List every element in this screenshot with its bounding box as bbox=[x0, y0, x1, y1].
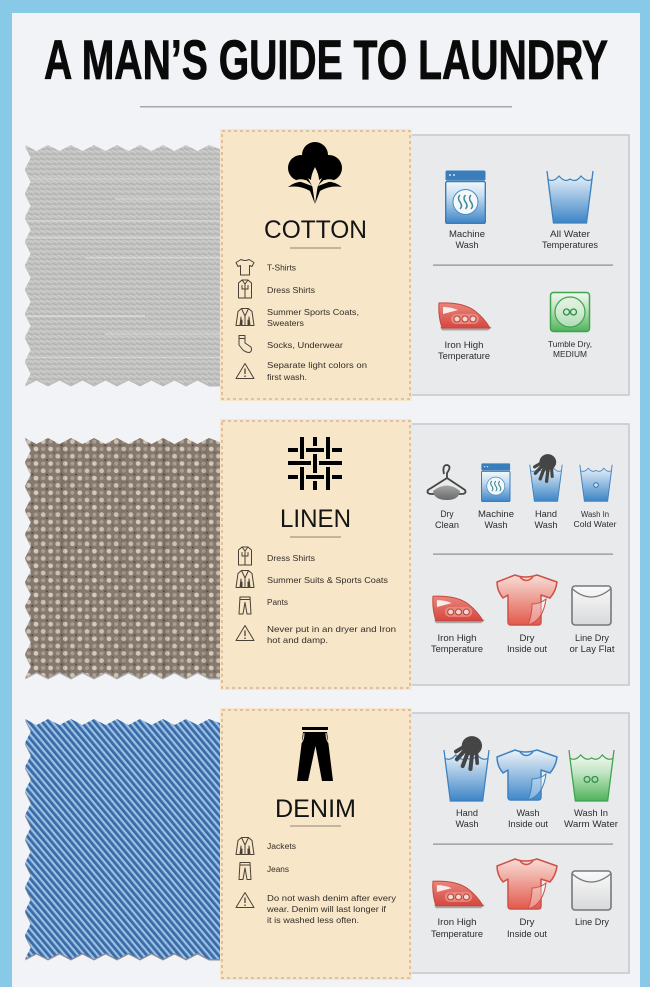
label: iron high temperature: Temperature bbox=[431, 644, 483, 654]
label: iron high temperature: Iron High bbox=[438, 633, 477, 643]
icon: dress shirt bbox=[238, 547, 252, 565]
label: tumble dry medium: Tumble Dry, bbox=[548, 340, 592, 349]
icon: tumble dry bbox=[550, 292, 590, 332]
icon: dress shirt bbox=[238, 280, 252, 298]
icon: iron bbox=[433, 596, 485, 623]
icon: pants bbox=[239, 862, 251, 880]
icon: jacket bbox=[236, 570, 254, 588]
title underline bbox=[140, 106, 512, 108]
gray care panel: linen bbox=[410, 424, 629, 685]
gray care panel: cotton bbox=[410, 135, 629, 395]
text: cotton warning: Separate light colors on bbox=[267, 360, 367, 370]
icon: machine wash bbox=[446, 170, 486, 224]
label: machine wash: Wash bbox=[484, 520, 508, 530]
label card: cotton bbox=[220, 129, 412, 401]
icon: line dry bbox=[572, 586, 611, 625]
label card: linen bbox=[220, 419, 412, 690]
icon: jacket bbox=[236, 308, 254, 326]
label: machine wash: Machine bbox=[478, 509, 514, 519]
section: linen bbox=[25, 419, 629, 690]
label: dry inside out bbox=[507, 633, 548, 654]
label: line dry or lay flat bbox=[570, 633, 615, 654]
label: iron high temperature: Iron High bbox=[444, 340, 484, 350]
text: coats: Summer Sports Coats, bbox=[267, 307, 359, 317]
label: hand wash bbox=[534, 509, 558, 530]
label: machine wash bbox=[478, 509, 514, 530]
icon: t-shirt bbox=[236, 260, 254, 275]
label: machine wash: Machine bbox=[449, 229, 485, 239]
label: line dry: Line Dry bbox=[575, 917, 610, 927]
icon: iron bbox=[433, 881, 485, 908]
heading: cotton: COTTON bbox=[264, 216, 367, 244]
label: wash in warm water bbox=[564, 808, 618, 829]
label: iron high temperature: Temperature bbox=[431, 929, 483, 939]
label: wash inside out bbox=[508, 808, 549, 829]
icon: iron bbox=[439, 303, 492, 330]
label: iron high temperature bbox=[431, 633, 483, 654]
icon: pants bbox=[239, 597, 251, 614]
panel divider bbox=[433, 264, 613, 266]
icon: machine wash bbox=[481, 463, 510, 502]
label: dry inside out: Inside out bbox=[507, 644, 548, 654]
text: t-shirts: T-Shirts bbox=[267, 262, 296, 272]
text: socks: Socks, Underwear bbox=[267, 340, 343, 350]
icon: warm water bbox=[569, 750, 614, 801]
text: coats bbox=[267, 307, 359, 328]
heading rule bbox=[290, 826, 341, 827]
label: wash in cold water: Cold Water bbox=[574, 520, 617, 529]
heading rule bbox=[290, 248, 341, 249]
text: dress shirts: Dress Shirts bbox=[267, 553, 315, 563]
label: hand wash: Wash bbox=[456, 819, 479, 829]
label: all water temperatures: All Water bbox=[550, 229, 590, 239]
heading: denim: DENIM bbox=[275, 795, 356, 823]
label: dry inside out: Inside out bbox=[507, 929, 548, 939]
label: iron high temperature: Temperature bbox=[438, 351, 490, 361]
icon: pants bbox=[297, 727, 333, 781]
label: all water temperatures: Temperatures bbox=[542, 240, 599, 250]
fabric swatch: linen bbox=[25, 438, 225, 680]
icon: dry inside out bbox=[497, 575, 557, 625]
text: denim warning: Do not wash denim after every bbox=[267, 893, 397, 903]
icon: warning bbox=[236, 892, 254, 908]
label: wash in warm water: Warm Water bbox=[564, 819, 618, 829]
label: dry inside out bbox=[507, 917, 548, 939]
section: cotton bbox=[25, 129, 629, 401]
label: machine wash bbox=[449, 229, 485, 250]
text: dress shirts: Dress Shirts bbox=[267, 285, 315, 295]
icon: sock bbox=[239, 336, 252, 352]
label: hand wash: Hand bbox=[535, 509, 557, 519]
gray care panel: denim bbox=[410, 713, 629, 973]
label: tumble dry medium bbox=[548, 340, 592, 359]
label: all water temperatures bbox=[542, 229, 599, 250]
icon: all water temperatures bbox=[547, 171, 593, 223]
label: dry inside out: Dry bbox=[520, 917, 535, 927]
label: dry clean: Dry bbox=[440, 509, 454, 519]
fabric swatch: denim bbox=[25, 719, 225, 960]
icon: dry clean hanger bbox=[428, 465, 466, 500]
icon: wash inside out bbox=[497, 750, 557, 800]
label: wash inside out: Wash bbox=[516, 808, 540, 818]
text: denim warning bbox=[266, 893, 397, 925]
label: dry clean: Clean bbox=[435, 520, 459, 530]
label: tumble dry medium: MEDIUM bbox=[553, 350, 587, 359]
label: iron high temperature bbox=[431, 917, 483, 939]
icon: linen weave bbox=[288, 437, 342, 490]
text: linen warning: hot and damp. bbox=[267, 635, 328, 645]
text: cotton warning: first wash. bbox=[267, 372, 307, 382]
label: hand wash: Wash bbox=[534, 520, 558, 530]
heading: linen: LINEN bbox=[280, 505, 351, 533]
label: wash inside out: Inside out bbox=[508, 819, 549, 829]
text: cotton warning bbox=[267, 360, 367, 382]
icon: dry inside out bbox=[497, 859, 557, 909]
panel divider bbox=[433, 844, 613, 845]
label card: denim bbox=[220, 708, 412, 980]
label: dry inside out: Dry bbox=[520, 633, 535, 643]
icon: warning bbox=[236, 364, 254, 378]
icon: jacket bbox=[236, 838, 254, 854]
section: denim bbox=[25, 708, 629, 980]
text: coats: Sweaters bbox=[267, 318, 304, 328]
label: machine wash: Wash bbox=[456, 240, 479, 250]
label: iron high temperature: Iron High bbox=[438, 917, 477, 927]
text: suits: Summer Suits & Sports Coats bbox=[267, 575, 388, 585]
label: dry clean bbox=[435, 509, 459, 530]
text: denim warning: it is washed less often. bbox=[267, 915, 359, 925]
label: iron high temperature bbox=[438, 340, 490, 361]
label: line dry or lay flat: Line Dry bbox=[575, 633, 610, 643]
icon: hand wash bbox=[444, 736, 489, 801]
label: wash in cold water: Wash In bbox=[581, 510, 609, 519]
text: jeans: Jeans bbox=[267, 864, 289, 874]
text: jackets: Jackets bbox=[267, 841, 296, 851]
text: pants: Pants bbox=[267, 597, 288, 607]
icon: line dry bbox=[572, 871, 611, 910]
label: line dry or lay flat: or Lay Flat bbox=[570, 644, 615, 654]
icon: cotton plant bbox=[288, 142, 342, 204]
icon: warning bbox=[236, 626, 254, 640]
text: linen warning: Never put in an dryer and Iron bbox=[267, 624, 396, 634]
label: wash in warm water: Wash In bbox=[574, 808, 608, 818]
panel divider bbox=[433, 554, 613, 555]
heading rule bbox=[290, 536, 341, 538]
label: wash in cold water bbox=[574, 510, 617, 529]
text: linen warning bbox=[267, 624, 396, 645]
icon: cold water bbox=[580, 465, 612, 501]
text: denim warning: wear. Denim will last longer if bbox=[266, 904, 387, 914]
fabric swatch: cotton bbox=[25, 145, 225, 386]
label: hand wash: Hand bbox=[456, 808, 478, 818]
icon: hand wash bbox=[530, 454, 562, 501]
label: hand wash bbox=[456, 808, 479, 829]
